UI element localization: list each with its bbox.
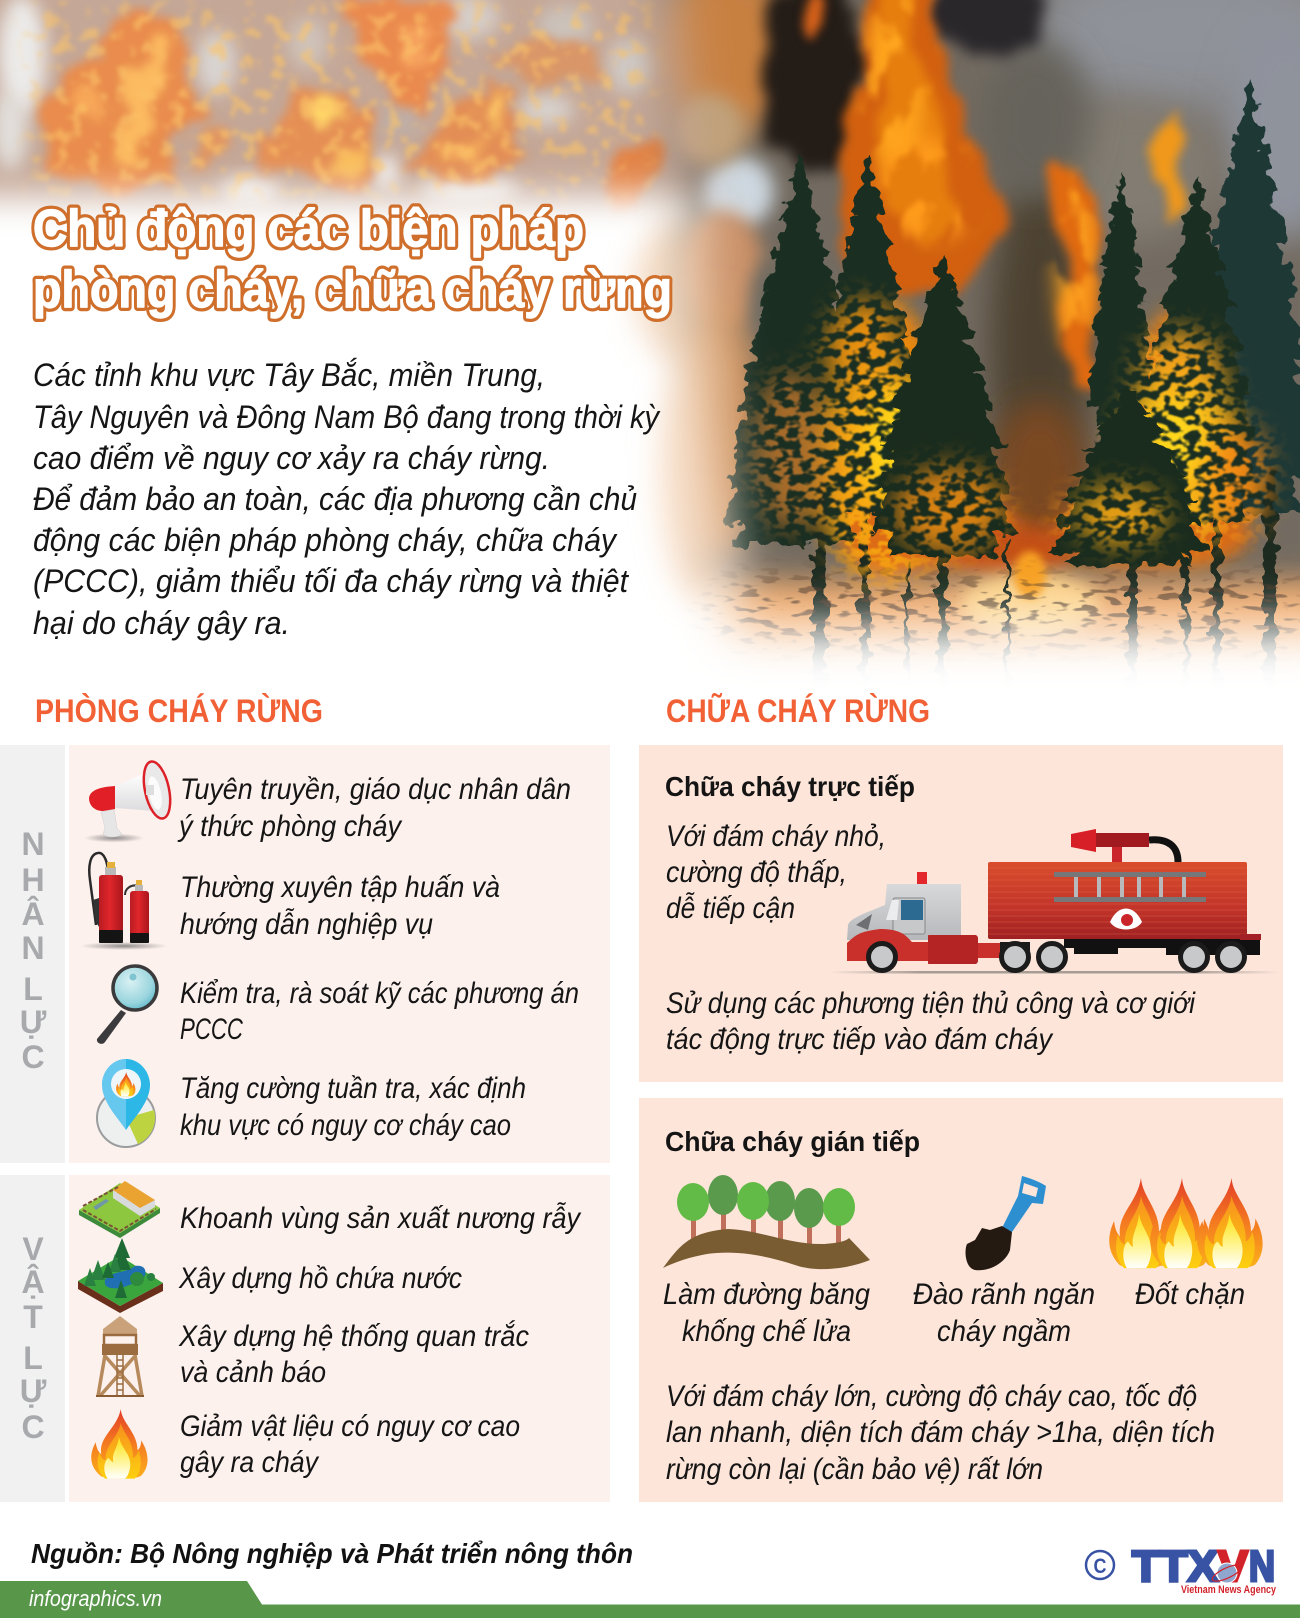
side tab: nhân lực: N — [21, 826, 45, 862]
wheels — [868, 944, 1244, 970]
icon: map pin with flame — [97, 1059, 155, 1147]
back pine trees — [724, 78, 1300, 700]
panel: chữa cháy gián tiếp — [639, 1098, 1283, 1502]
label: làm đường băng: khống chế lửa — [682, 1315, 851, 1348]
footer bar — [0, 1581, 1300, 1618]
container — [988, 862, 1247, 939]
panel: nhân lực — [0, 745, 610, 1163]
text: direct firefighting: Sử dụng các phương tiện thủ công và cơ giới — [666, 987, 1196, 1020]
bright sparks — [70, 25, 510, 180]
text: thường xuyên tập huấn: Thường xuyên tập huấn và — [180, 871, 500, 904]
dark smoke column — [762, 0, 1055, 180]
tagline: Vietnam News Agency — [1181, 1584, 1277, 1596]
text: thường xuyên tập huấn — [180, 871, 500, 941]
red lower body — [847, 929, 1000, 964]
title fill — [33, 200, 672, 319]
label: làm đường băng — [663, 1278, 870, 1348]
side tab: vật lực — [0, 1175, 65, 1502]
heading: chữa cháy rừng: CHỮA CHÁY RỪNG — [666, 693, 930, 729]
intro paragraph: động các biện pháp phòng cháy, chữa cháy — [33, 522, 618, 558]
speckles on front trees — [894, 466, 1166, 554]
intro paragraph: Các tỉnh khu vực Tây Bắc, miền Trung, — [33, 357, 545, 393]
icon: three flames — [1109, 1178, 1263, 1268]
chassis — [1000, 934, 1261, 962]
text: small fires: Với đám cháy nhỏ, — [666, 820, 886, 853]
text: large fires — [666, 1380, 1215, 1486]
intro paragraph: cao điểm về nguy cơ xảy ra cháy rừng. — [33, 440, 550, 476]
hero photo: forest fire scene — [641, 0, 1300, 669]
text: thường xuyên tập huấn: hướng dẫn nghiệp vụ — [180, 908, 433, 941]
label: đào rãnh — [913, 1278, 1095, 1348]
title outline: Chủ động các biện pháp — [33, 200, 584, 258]
text: tuyên truyền — [177, 773, 571, 843]
text: hệ thống quan trắc: và cảnh báo — [180, 1356, 326, 1389]
wordmark — [1132, 1542, 1275, 1591]
fine ember grain — [30, 0, 650, 195]
side tab: vật lực: T — [23, 1299, 43, 1335]
text: kiểm tra — [180, 977, 579, 1046]
icon: megaphone — [84, 759, 175, 842]
copyright mark — [1086, 1551, 1114, 1579]
side tab: vật lực: Ự — [20, 1373, 47, 1409]
side tab: nhân lực: L — [23, 971, 43, 1007]
smoke and sky background — [641, 0, 1300, 606]
title fill: phòng cháy, chữa cháy rừng — [33, 261, 672, 319]
globe — [1210, 1562, 1244, 1584]
ground shadow — [830, 971, 1280, 974]
label: đào rãnh: cháy ngầm — [937, 1315, 1071, 1348]
side tab: nhân lực: H — [21, 862, 45, 898]
title outline — [33, 200, 672, 319]
wordmark: N — [1249, 1542, 1275, 1591]
emblem — [1110, 908, 1142, 930]
green band — [0, 1581, 1300, 1618]
text: small fires: cường độ thấp, — [666, 856, 847, 889]
label: làm đường băng: Làm đường băng — [663, 1278, 870, 1311]
text: large fires: rừng còn lại (cần bảo vệ) rất lớn — [666, 1453, 1043, 1486]
intro paragraph: (PCCC), giảm thiểu tối đa cháy rừng và thiệt — [33, 563, 629, 599]
side tab: nhân lực: N — [21, 930, 45, 966]
icon: fire extinguishers — [80, 853, 168, 950]
icon: fire truck — [830, 829, 1280, 974]
dark needles on lower band — [660, 580, 1300, 650]
wordmark: TTX — [1132, 1542, 1218, 1591]
front pine trees — [869, 256, 1209, 700]
side tab: nhân lực: Â — [21, 896, 45, 932]
text: giảm vật liệu: gây ra cháy — [180, 1446, 320, 1479]
text: kiểm tra: PCCC — [180, 1013, 243, 1046]
text: giảm vật liệu: Giảm vật liệu có nguy cơ cao — [180, 1410, 520, 1443]
content background — [69, 745, 610, 1163]
rising flame columns — [810, 0, 1180, 390]
text: giảm vật liệu — [180, 1410, 520, 1479]
text: tuyên truyền: Tuyên truyền, giáo dục nhân dân — [180, 773, 571, 806]
text: hệ thống quan trắc: Xây dựng hệ thống quan trắc — [178, 1320, 529, 1353]
intro paragraph: Tây Nguyên và Đông Nam Bộ đang trong thời kỳ — [33, 399, 661, 435]
burning speckles inside back trees — [754, 300, 1268, 580]
subheading: Chữa cháy trực tiếp — [665, 771, 915, 802]
icon: farm plot — [79, 1181, 160, 1238]
side tab: nhân lực: Ự — [20, 1004, 47, 1040]
intro paragraph — [33, 357, 661, 641]
cab — [847, 872, 961, 940]
label: đốt chặn: Đốt chặn — [1135, 1278, 1245, 1311]
title — [33, 200, 672, 319]
side tab: nhân lực — [0, 745, 65, 1163]
side tab: vật lực: V — [22, 1231, 44, 1267]
text: large fires: lan nhanh, diện tích đám cháy >1ha, diện tích — [666, 1416, 1215, 1449]
text: small fires: dễ tiếp cận — [666, 892, 795, 925]
title fill: Chủ động các biện pháp — [33, 200, 584, 258]
label: đào rãnh: Đào rãnh ngăn — [913, 1278, 1095, 1311]
panel: chữa cháy trực tiếp — [639, 745, 1283, 1082]
fire glow behind the trees — [698, 294, 1300, 663]
text: direct firefighting — [666, 987, 1196, 1056]
icon: magnifier — [97, 966, 157, 1044]
panel background — [639, 1098, 1283, 1502]
intro paragraph: Để đảm bảo an toàn, các địa phương cần chủ — [33, 481, 637, 517]
text: hồ chứa nước: Xây dựng hồ chứa nước — [178, 1262, 462, 1295]
icon: trees on firebreak road — [663, 1175, 870, 1269]
panel: vật lực — [0, 1175, 610, 1502]
text: kiểm tra: Kiểm tra, rà soát kỹ các phương án — [180, 977, 579, 1010]
website label: infographics.vn — [29, 1586, 162, 1611]
icon: lake with trees — [78, 1238, 163, 1313]
side tab: vật lực: Ậ — [21, 1264, 45, 1300]
text: tăng cường tuần tra: Tăng cường tuần tra, xác định — [180, 1072, 526, 1105]
content background — [69, 1175, 610, 1502]
copyright mark: C — [1094, 1555, 1106, 1578]
intro paragraph: hại do cháy gây ra. — [33, 605, 290, 641]
text: tuyên truyền: ý thức phòng cháy — [177, 810, 403, 843]
ashen band — [0, 0, 726, 220]
panel background — [639, 745, 1283, 1082]
text: tăng cường tuần tra: khu vực có nguy cơ cháy cao — [180, 1109, 511, 1142]
wordmark: V — [1218, 1542, 1249, 1591]
icon: watch tower — [96, 1316, 144, 1396]
nozzle and hose — [1071, 829, 1178, 863]
ladder — [1054, 872, 1206, 902]
text: large fires: Với đám cháy lớn, cường độ cháy cao, tốc độ — [666, 1380, 1197, 1413]
text: direct firefighting: tác động trực tiếp vào đám cháy — [666, 1023, 1054, 1056]
source note: Nguồn: Bộ Nông nghiệp và Phát triển nông thôn — [31, 1538, 633, 1569]
title outline: phòng cháy, chữa cháy rừng — [33, 261, 672, 319]
text: tăng cường tuần tra — [180, 1072, 526, 1142]
text: hệ thống quan trắc — [178, 1320, 529, 1389]
side tab: vật lực: C — [21, 1409, 45, 1445]
icon: shovel — [966, 1176, 1046, 1270]
icon: flame — [91, 1409, 148, 1479]
side tab: vật lực: L — [23, 1340, 43, 1376]
text: khoanh vùng: Khoanh vùng sản xuất nương rẫy — [180, 1202, 582, 1235]
side tab: nhân lực: C — [21, 1039, 45, 1075]
peach haze beside the title — [635, 215, 745, 600]
heading: phòng cháy rừng: PHÒNG CHÁY RỪNG — [35, 693, 323, 729]
orange ember clouds — [42, 0, 660, 205]
blurred ember texture, top left — [0, 0, 726, 221]
flame streaks — [865, 0, 1093, 350]
logo: TTXVN — [1086, 1542, 1277, 1596]
text: small fires — [666, 820, 886, 925]
subheading: Chữa cháy gián tiếp — [665, 1126, 920, 1157]
